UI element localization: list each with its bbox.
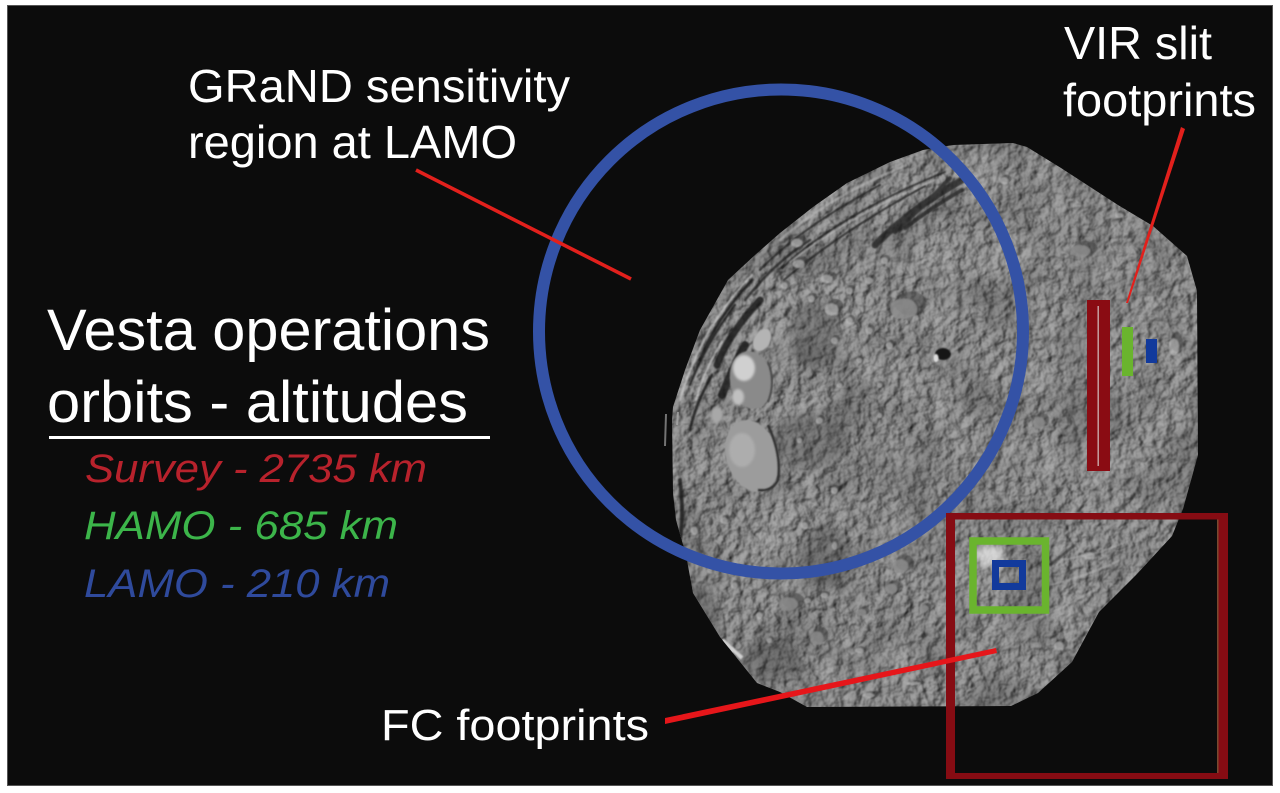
leader line: FC bbox=[665, 648, 997, 724]
heading: Vesta operations orbits - altitudes: Vesta operations bbox=[47, 298, 490, 363]
dark streak near the south-east bright patch bbox=[1050, 545, 1075, 565]
large muted craters bbox=[779, 241, 1098, 645]
asteroid Vesta image bbox=[660, 135, 1210, 715]
label: VIR slit footprints: VIR slit bbox=[1064, 17, 1212, 69]
heading: Vesta operations orbits - altitudes: orbits - altitudes bbox=[47, 370, 468, 435]
bright splash near south-east bbox=[975, 545, 1005, 567]
FC footprint: LAMO bbox=[996, 564, 1022, 586]
GRaND sensitivity region circle bbox=[539, 90, 1023, 574]
limb slivers on the far left bbox=[665, 412, 678, 446]
bright lower-left limb streak bbox=[722, 640, 742, 658]
label: GRaND sensitivity region: region at LAMO bbox=[188, 116, 517, 168]
small bright craters bbox=[691, 175, 1183, 698]
VIR slit footprint: survey bbox=[1087, 300, 1110, 471]
legend: HAMO: HAMO - 685 km bbox=[84, 504, 398, 548]
legend: LAMO: LAMO - 210 km bbox=[84, 562, 390, 606]
label: GRaND sensitivity region: GRaND sensitivity bbox=[188, 60, 570, 112]
fresh dark crater bbox=[928, 310, 1010, 388]
grey basin shading bbox=[682, 300, 850, 682]
label: VIR slit footprints: footprints bbox=[1063, 74, 1256, 126]
left limb ridges bbox=[680, 280, 760, 540]
large twin craters bbox=[710, 328, 781, 492]
legend: survey: Survey - 2735 km bbox=[85, 447, 427, 491]
heading: Vesta operations orbits - altitudes bbox=[47, 298, 490, 439]
leader line: VIR bbox=[1126, 127, 1185, 303]
leader line: GRaND bbox=[416, 170, 631, 279]
label: FC footprints: FC footprints bbox=[381, 701, 649, 750]
legend: orbit altitudes bbox=[84, 447, 427, 606]
FC footprint: HAMO bbox=[973, 541, 1046, 610]
ray streaks in the south-east bbox=[1020, 540, 1130, 625]
VIR slit footprint: HAMO bbox=[1122, 327, 1133, 376]
dark grooves across the upper limb bbox=[680, 166, 962, 540]
VIR slit footprint: LAMO bbox=[1146, 339, 1157, 363]
FC footprint: survey bbox=[946, 513, 1228, 779]
